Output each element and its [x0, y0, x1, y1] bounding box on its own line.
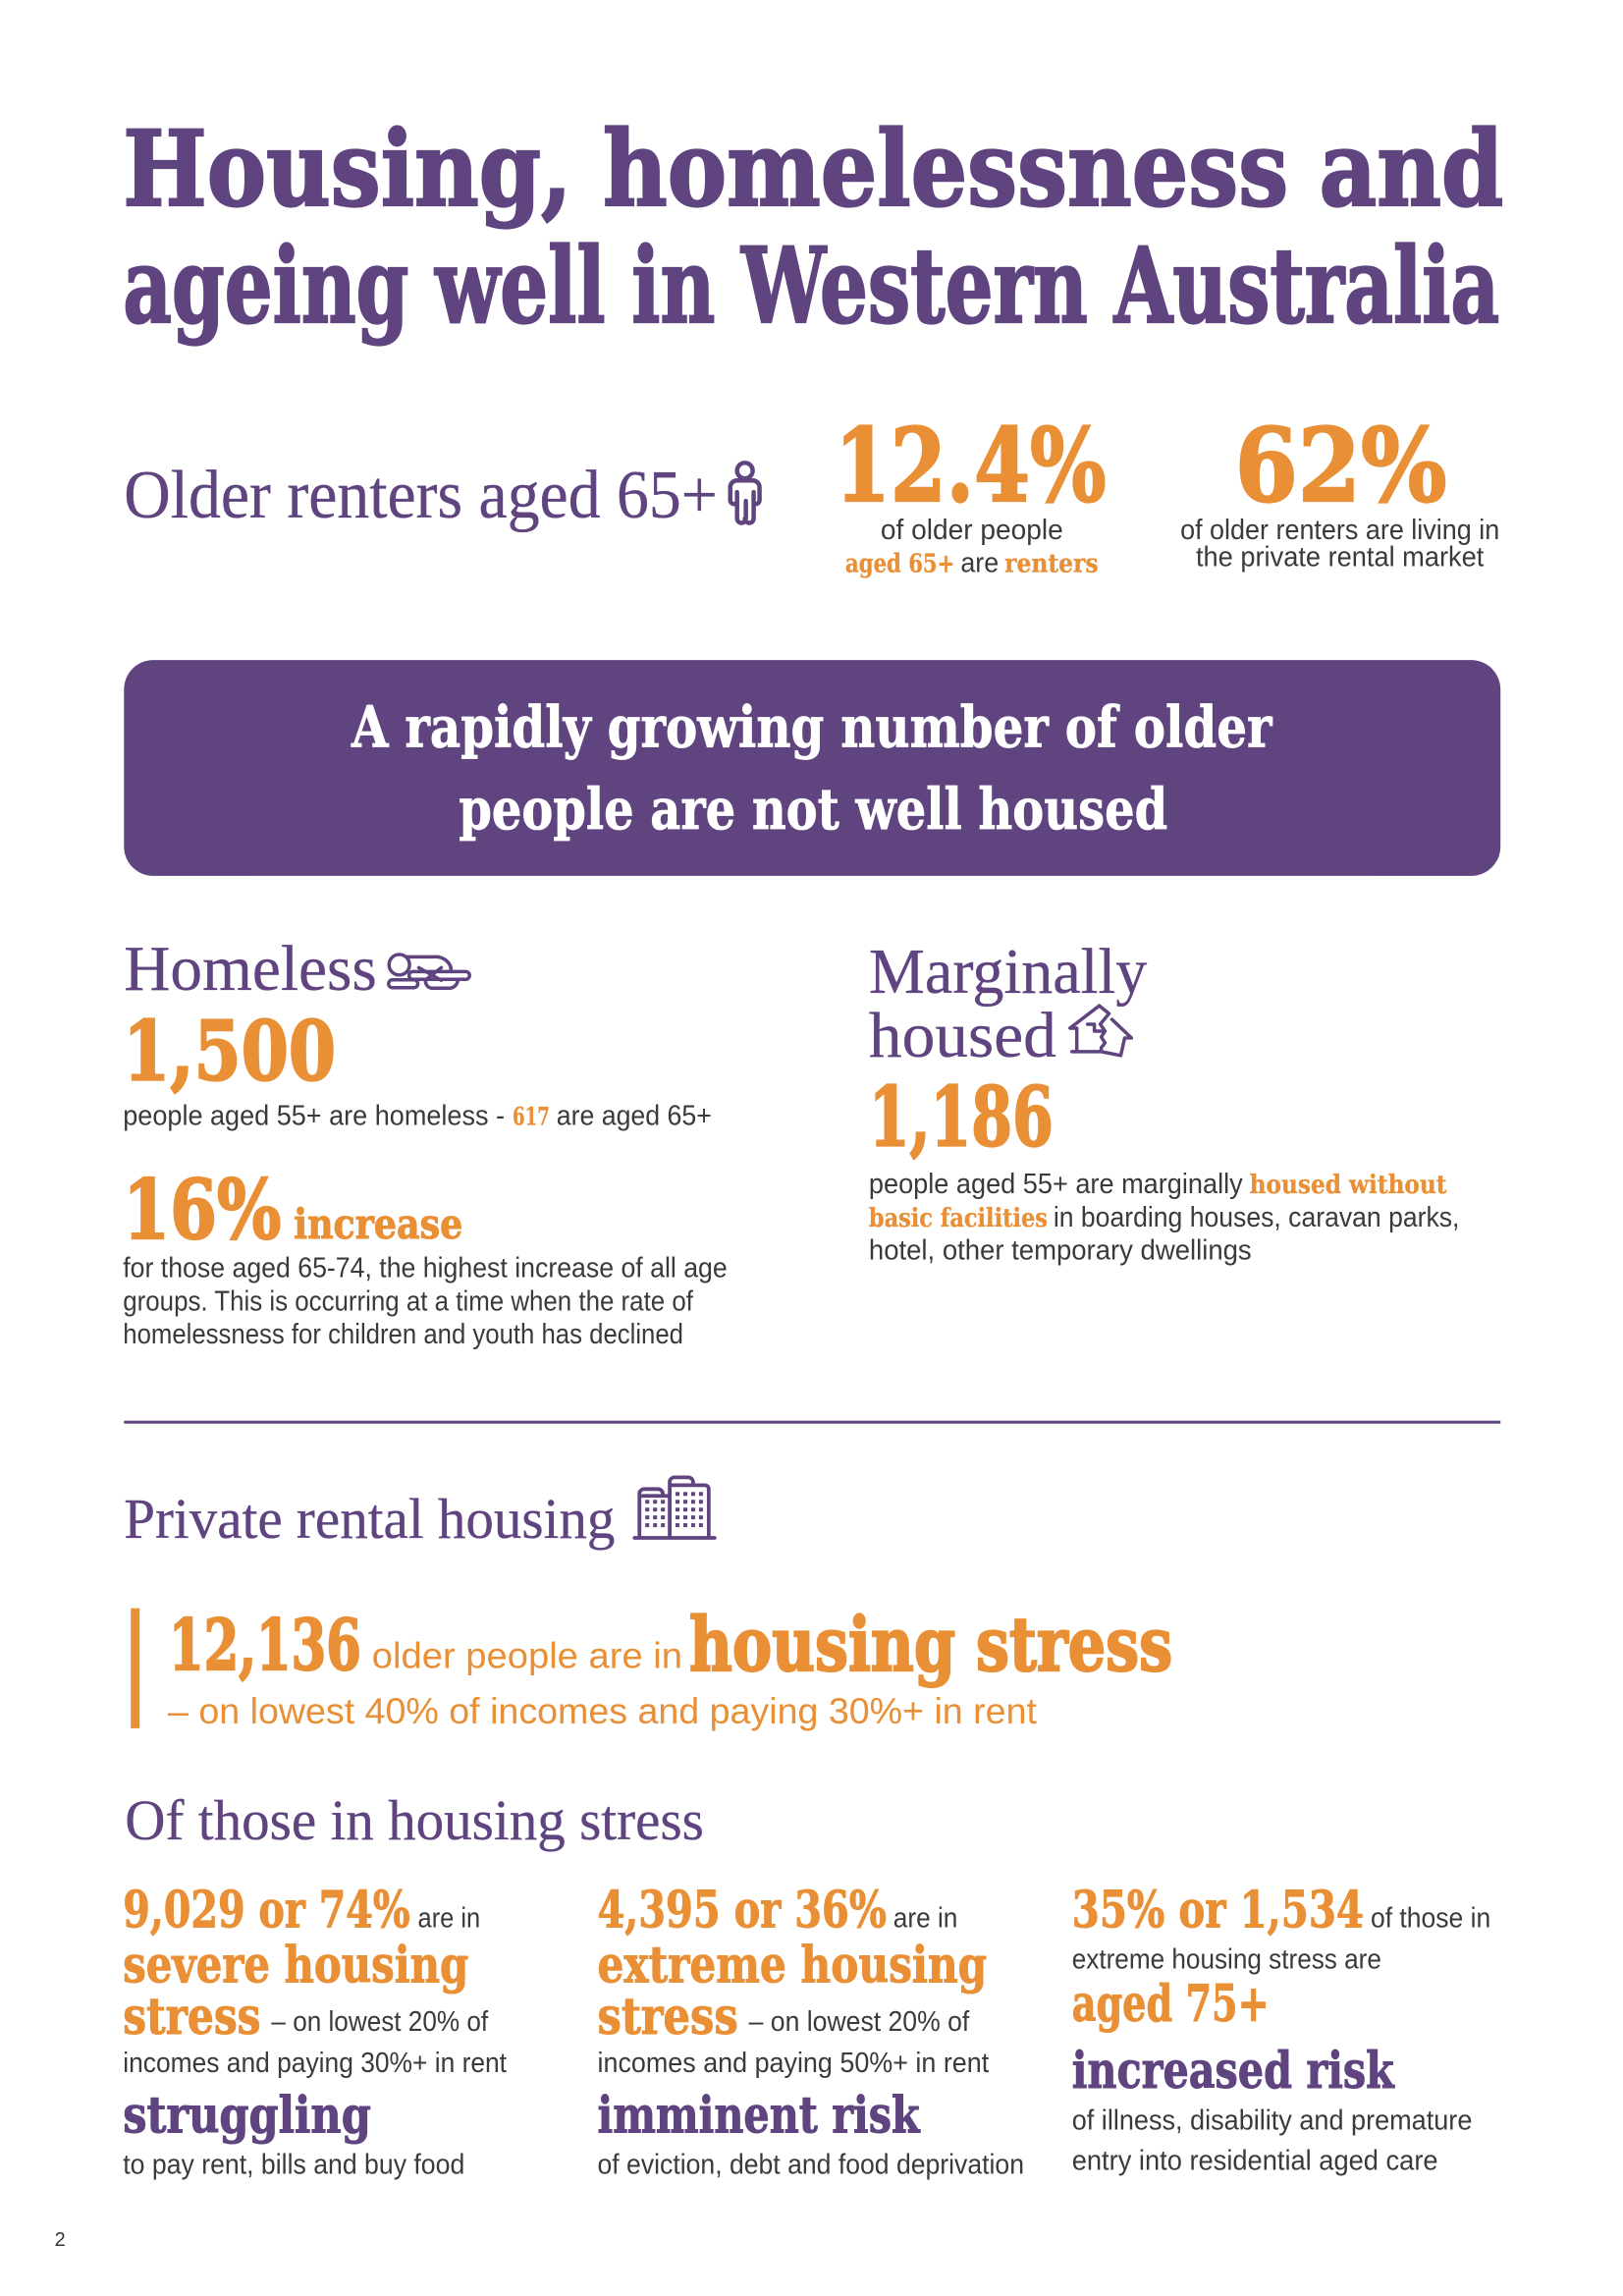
stat: 12.4% of older people aged 65+ are renters [835, 407, 1107, 579]
stat: 62% of older renters in the private rental market: 62% [1235, 407, 1447, 525]
text: marginally housed description: hotel, other temporary dwellings [869, 1235, 1252, 1267]
column: extreme housing stress: – on lowest 20% of [749, 2006, 970, 2038]
panel: marginally housed [869, 937, 1459, 1267]
stat: 12.4% of older people aged 65+ are renters: of older people [881, 515, 1063, 546]
stat: 12.4% of older people aged 65+ are renters: aged 65+ [845, 550, 954, 579]
heading: marginally housed: Marginally [869, 937, 1147, 1008]
icon: person [730, 463, 760, 522]
column: severe housing stress [123, 1881, 507, 2180]
stat: 62% of older renters in the private rental market: the private rental market [1196, 542, 1484, 574]
stat: 16% increase [123, 1162, 462, 1258]
text: marginally housed description: in boarding houses, caravan parks, [1054, 1202, 1459, 1233]
heading: older renters aged 65+: Older renters aged 65+ [124, 458, 718, 533]
heading: marginally housed: housed [869, 1001, 1056, 1071]
text: people homeless [123, 1100, 712, 1131]
column: aged 75+: increased risk [1072, 2041, 1395, 2101]
column: severe housing stress: incomes and paying 30%+ in rent [123, 2048, 507, 2079]
banner: A rapidly growing number of older [351, 694, 1272, 761]
column: extreme housing stress: stress [598, 1987, 738, 2047]
column: severe housing stress: 9,029 or 74% [123, 1881, 410, 1941]
column: aged 75+: extreme housing stress are [1072, 1943, 1381, 1975]
column: severe housing stress: stress [123, 1987, 260, 2047]
stat: 12.4% of older people aged 65+ are renters: 12.4% [835, 407, 1107, 525]
heading: marginally housed [869, 937, 1147, 1071]
callout: 12,136 in housing stress [131, 1601, 1172, 1731]
column: extreme housing stress: of eviction, debt and food deprivation [598, 2149, 1024, 2180]
heading: homeless: Homeless [124, 934, 377, 1005]
text: people homeless: are aged 65+ [557, 1100, 712, 1131]
text: marginally housed description: people aged 55+ are marginally [869, 1169, 1243, 1200]
text: 16% description [123, 1253, 728, 1350]
panel: homeless [123, 934, 728, 1350]
text: 16% description: for those aged 65-74, the highest increase of all age [123, 1253, 728, 1285]
callout: 12,136 in housing stress: – on lowest 40% of incomes and paying 30%+ in rent [168, 1691, 1037, 1731]
callout: 12,136 in housing stress: 12,136 [169, 1604, 361, 1686]
column: severe housing stress: struggling [123, 2086, 371, 2146]
stat: 16% increase: 16% [123, 1162, 281, 1258]
column: extreme housing stress: are in [893, 1903, 957, 1935]
icon: cracked house [1070, 1006, 1131, 1056]
stat: 62% of older renters in the private rental market [1180, 407, 1499, 574]
text: 16% description: groups. This is occurring at a time when the rate of [123, 1285, 694, 1317]
column: severe housing stress: severe housing [123, 1935, 468, 1995]
column: extreme housing stress [598, 1881, 1024, 2180]
stat: 16% increase: increase [294, 1200, 462, 1248]
stat: 1,186: 1,186 [869, 1068, 1054, 1165]
stat: 62% of older renters in the private rental market: of older renters are living in [1180, 515, 1499, 546]
column: extreme housing stress: extreme housing [598, 1935, 987, 1995]
callout: 12,136 in housing stress: housing stress [689, 1601, 1172, 1688]
stat: 1,500: 1,500 [123, 1004, 336, 1100]
column: aged 75+: aged 75+ [1072, 1974, 1270, 2034]
column: aged 75+: 35% or 1,534 [1072, 1881, 1364, 1941]
column: severe housing stress: to pay rent, bills and buy food [123, 2149, 464, 2180]
callout: 12,136 in housing stress: older people are in [372, 1635, 682, 1675]
stat: 12.4% of older people aged 65+ are renters: are [960, 548, 999, 579]
text: people homeless: people aged 55+ are homeless - [123, 1100, 505, 1131]
banner [124, 660, 1500, 876]
column: aged 75+: of illness, disability and premature [1072, 2105, 1472, 2137]
column: aged 75+: entry into residential aged care [1072, 2145, 1438, 2176]
column: aged 75+ [1072, 1881, 1490, 2176]
text: marginally housed description [869, 1169, 1459, 1267]
icon: apartment buildings [634, 1477, 715, 1538]
page number: 2 [55, 2229, 66, 2251]
text: marginally housed description: housed without [1250, 1171, 1447, 1200]
column: extreme housing stress: imminent risk [598, 2086, 921, 2146]
heading: private rental housing: Private rental housing [124, 1487, 615, 1551]
column: severe housing stress: are in [418, 1903, 480, 1935]
heading: of those in housing stress: Of those in housing stress [125, 1788, 704, 1852]
text: people homeless: 617 [513, 1102, 550, 1130]
column: extreme housing stress: 4,395 or 36% [598, 1881, 887, 1941]
column: severe housing stress: – on lowest 20% of [271, 2006, 489, 2038]
icon: person sleeping [389, 955, 469, 988]
column: extreme housing stress: incomes and paying 50%+ in rent [598, 2048, 989, 2079]
banner: people are not well housed [459, 776, 1167, 843]
column: aged 75+: of those in [1371, 1903, 1490, 1935]
stat: 12.4% of older people aged 65+ are renters: renters [1004, 550, 1099, 579]
title [123, 108, 1503, 347]
text: marginally housed description: basic facilities [869, 1204, 1048, 1233]
text: 16% description: homelessness for children and youth has declined [123, 1319, 683, 1350]
